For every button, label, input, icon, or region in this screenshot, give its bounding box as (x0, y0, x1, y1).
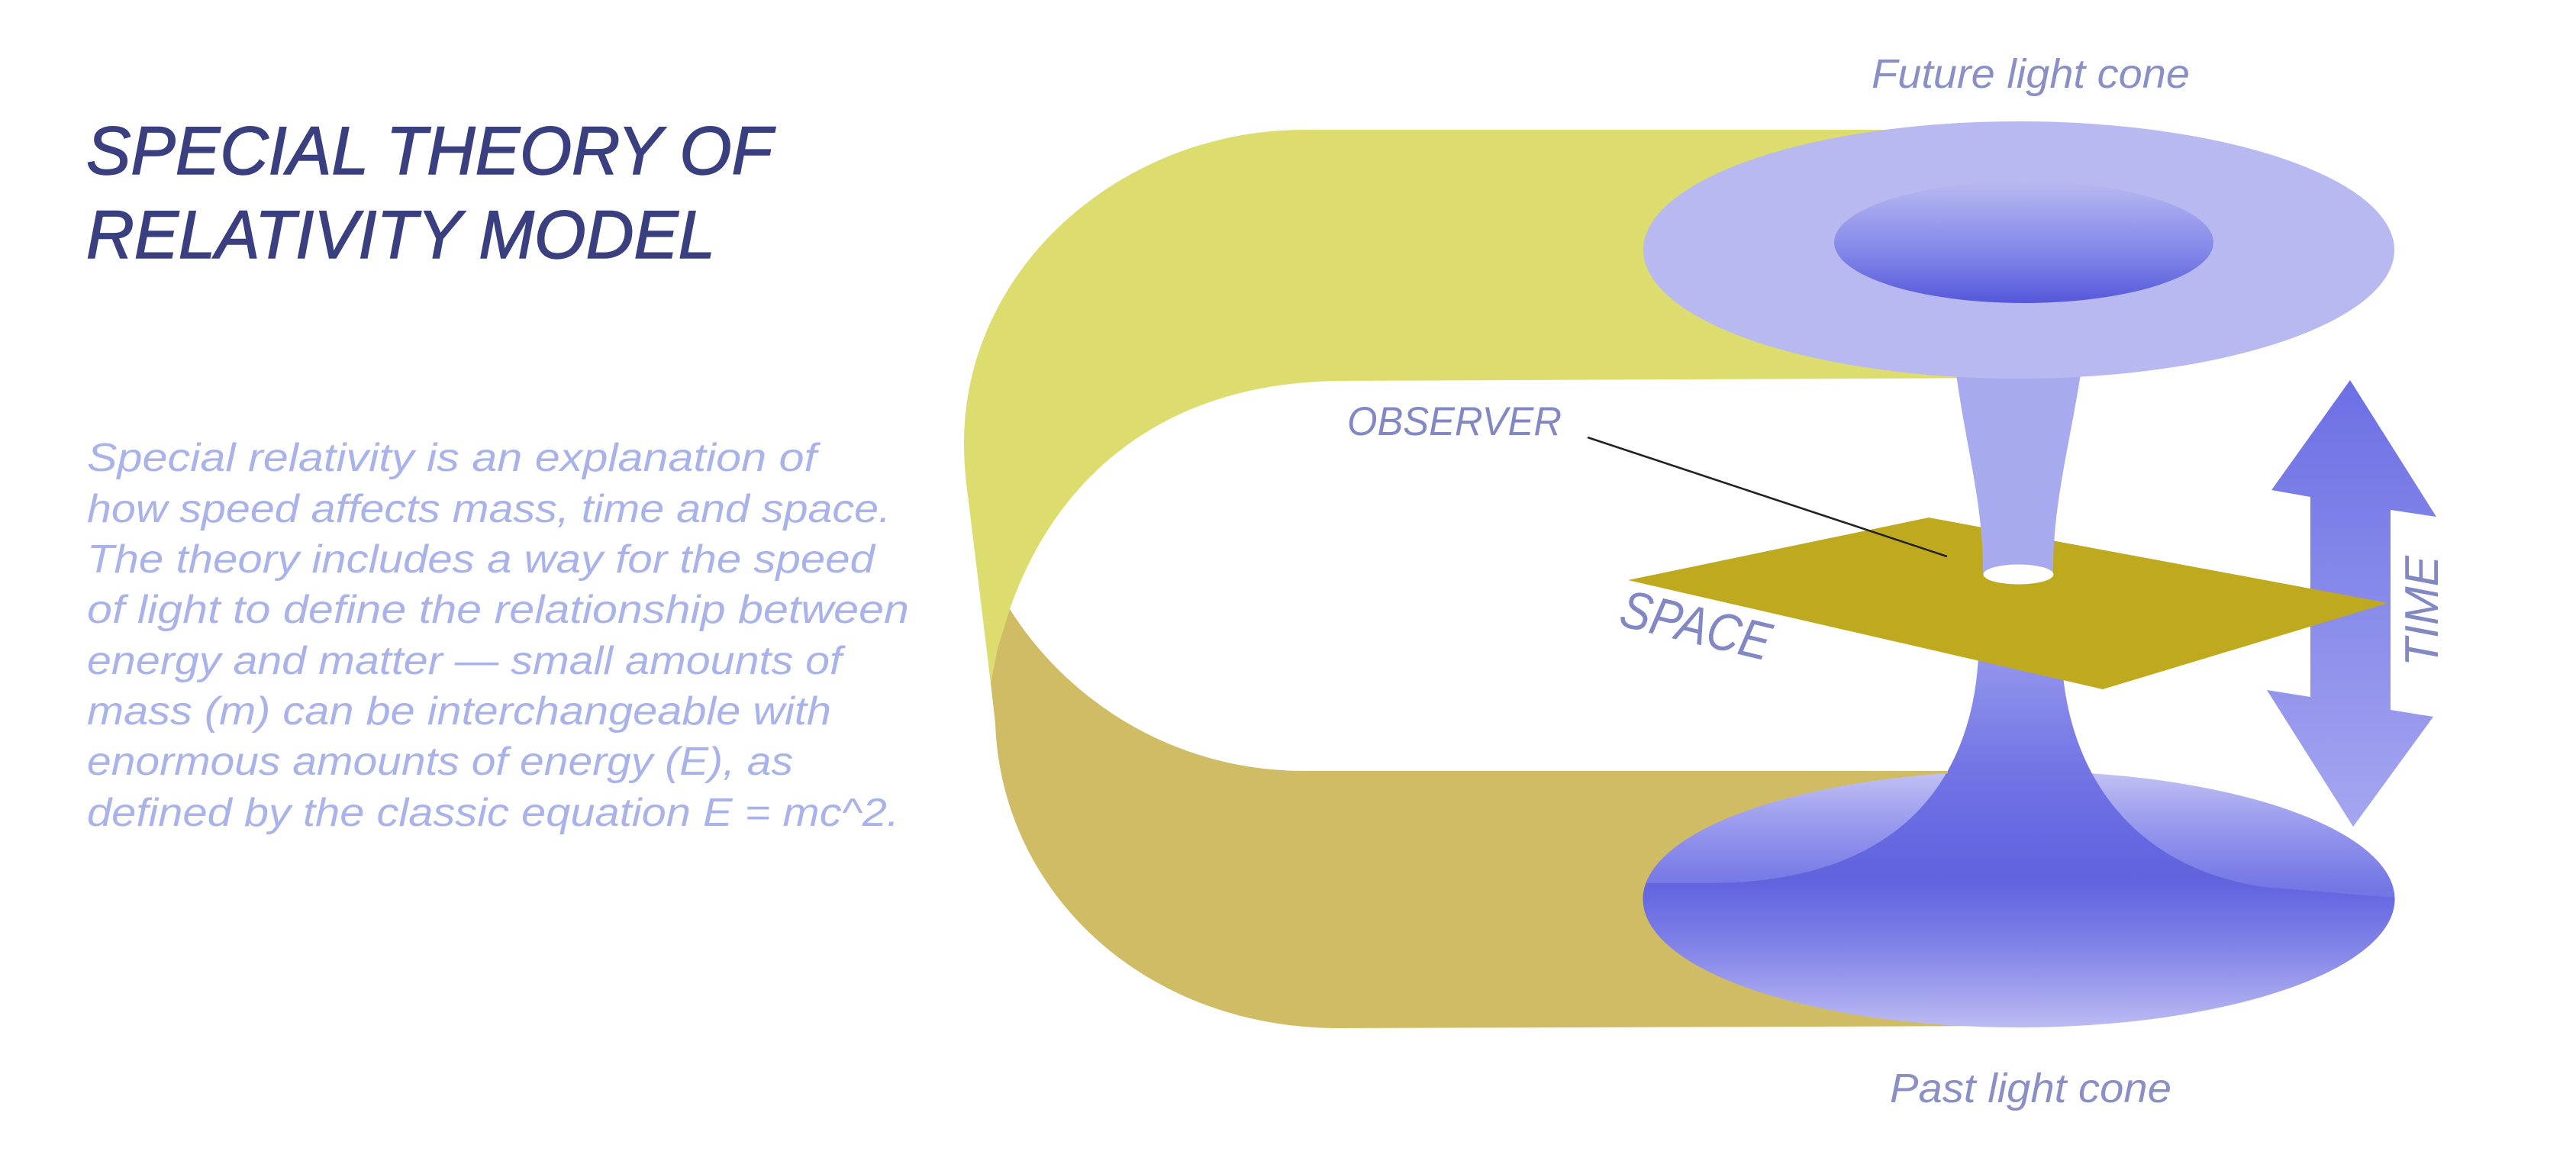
body text: enormous amounts of energy (E), as (87, 740, 793, 784)
label: past light cone: Past light cone (1890, 1066, 2171, 1111)
label: time: TIME (2396, 555, 2449, 666)
time arrow (2267, 380, 2436, 827)
future light cone disc (1643, 121, 2394, 379)
label: observer: OBSERVER (1347, 399, 1562, 444)
body text: mass (m) can be interchangeable with (87, 689, 831, 734)
body text (87, 436, 909, 835)
observer hole (1983, 565, 2053, 585)
observer pointer line (1588, 437, 1947, 556)
future light cone stem (1956, 374, 2081, 574)
label: space: SPACE (1614, 579, 1778, 672)
label: future light cone: Future light cone (1872, 51, 2190, 97)
future light cone inner ellipse (1834, 182, 2213, 303)
space plane (1628, 518, 2388, 689)
title: RELATIVITY MODEL (86, 196, 715, 273)
tan lower band (991, 609, 2030, 1028)
title (86, 112, 776, 273)
title: SPECIAL THEORY OF (86, 112, 776, 189)
past light cone funnel (1633, 656, 2404, 901)
body text: defined by the classic equation E = mc^2. (87, 791, 899, 835)
past light cone disc (1643, 771, 2395, 1027)
body text: of light to define the relationship between (87, 588, 909, 632)
body text: The theory includes a way for the speed (87, 537, 876, 582)
body text: energy and matter — small amounts of (87, 639, 846, 683)
body text: Special relativity is an explanation of (87, 436, 821, 480)
body text: how speed affects mass, time and space. (87, 487, 891, 531)
yellow upper band (964, 130, 2030, 683)
